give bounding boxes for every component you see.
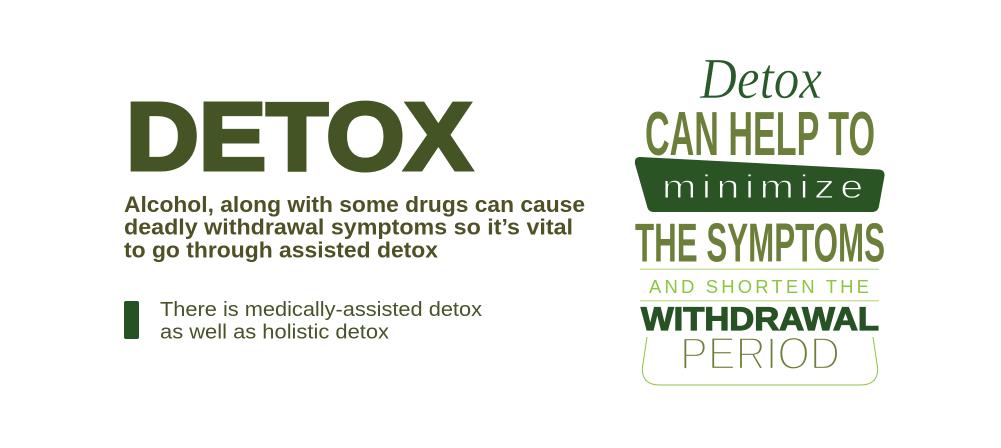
- intro paragraph: deadly withdrawal symptoms so it’s vital: [124, 214, 573, 240]
- bullet text: [160, 299, 482, 344]
- bullet marker: [124, 301, 139, 339]
- word: PERIOD: PERIOD: [680, 328, 840, 379]
- headline: WITHDRAWAL: WITHDRAWAL: [641, 301, 879, 337]
- title: DETOX: DETOX: [126, 84, 472, 190]
- banner shape: [635, 157, 885, 212]
- bullet text: There is medically-assisted detox: [160, 299, 482, 321]
- intro paragraph: [124, 192, 585, 262]
- intro paragraph: Alcohol, along with some drugs can cause: [124, 192, 585, 217]
- script heading: Detox: Detox: [699, 46, 822, 111]
- banner: minimize: [635, 157, 885, 212]
- subline: AND SHORTEN THE: AND SHORTEN THE: [649, 276, 869, 297]
- upper rule: [640, 268, 879, 270]
- bracket frame: [642, 337, 878, 385]
- lower rule: [640, 300, 879, 302]
- bullet text: as well as holistic detox: [160, 322, 389, 344]
- intro paragraph: to go through assisted detox: [124, 238, 439, 262]
- banner word: minimize: [662, 168, 863, 205]
